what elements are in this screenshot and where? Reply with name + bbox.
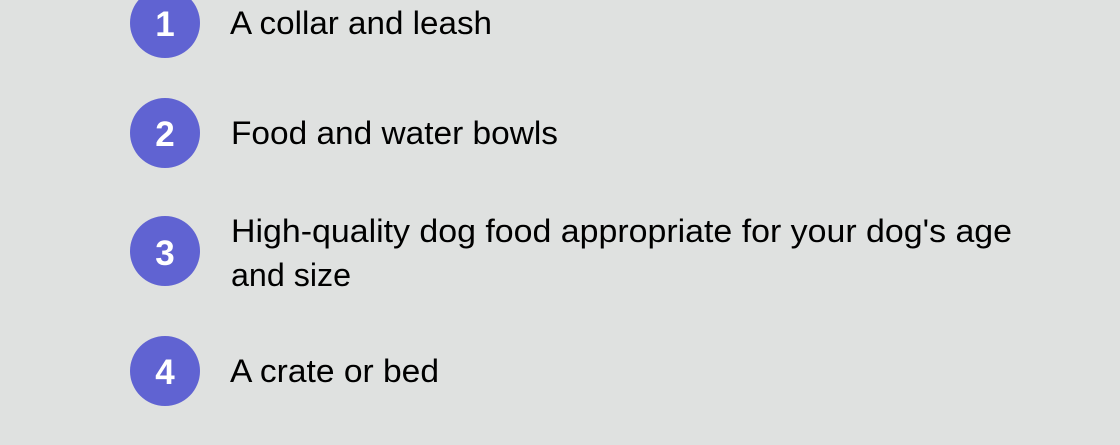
- number badge 1: 1: [155, 5, 175, 44]
- number badge 2: 2: [155, 115, 175, 154]
- number badge 2: [130, 98, 200, 168]
- item 1: collar and leash: [130, 0, 492, 58]
- item 3: dog food: [130, 213, 1012, 293]
- item 1 text: A collar and leash: [230, 5, 492, 41]
- number badge 1: [130, 0, 200, 58]
- number badge 4: 4: [155, 353, 175, 392]
- number badge 3: 3: [155, 234, 175, 273]
- number badge 4: [130, 336, 200, 406]
- item 3 text: and size: [231, 257, 351, 293]
- item 4: crate or bed: [130, 336, 439, 406]
- item 3 text: High-quality dog food appropriate for your dog's age: [231, 213, 1012, 249]
- item 3 text: [231, 213, 1012, 293]
- item 2 text: Food and water bowls: [231, 115, 558, 151]
- number badge 3: [130, 216, 200, 286]
- item 4 text: A crate or bed: [230, 353, 439, 389]
- item 2: bowls: [130, 98, 558, 168]
